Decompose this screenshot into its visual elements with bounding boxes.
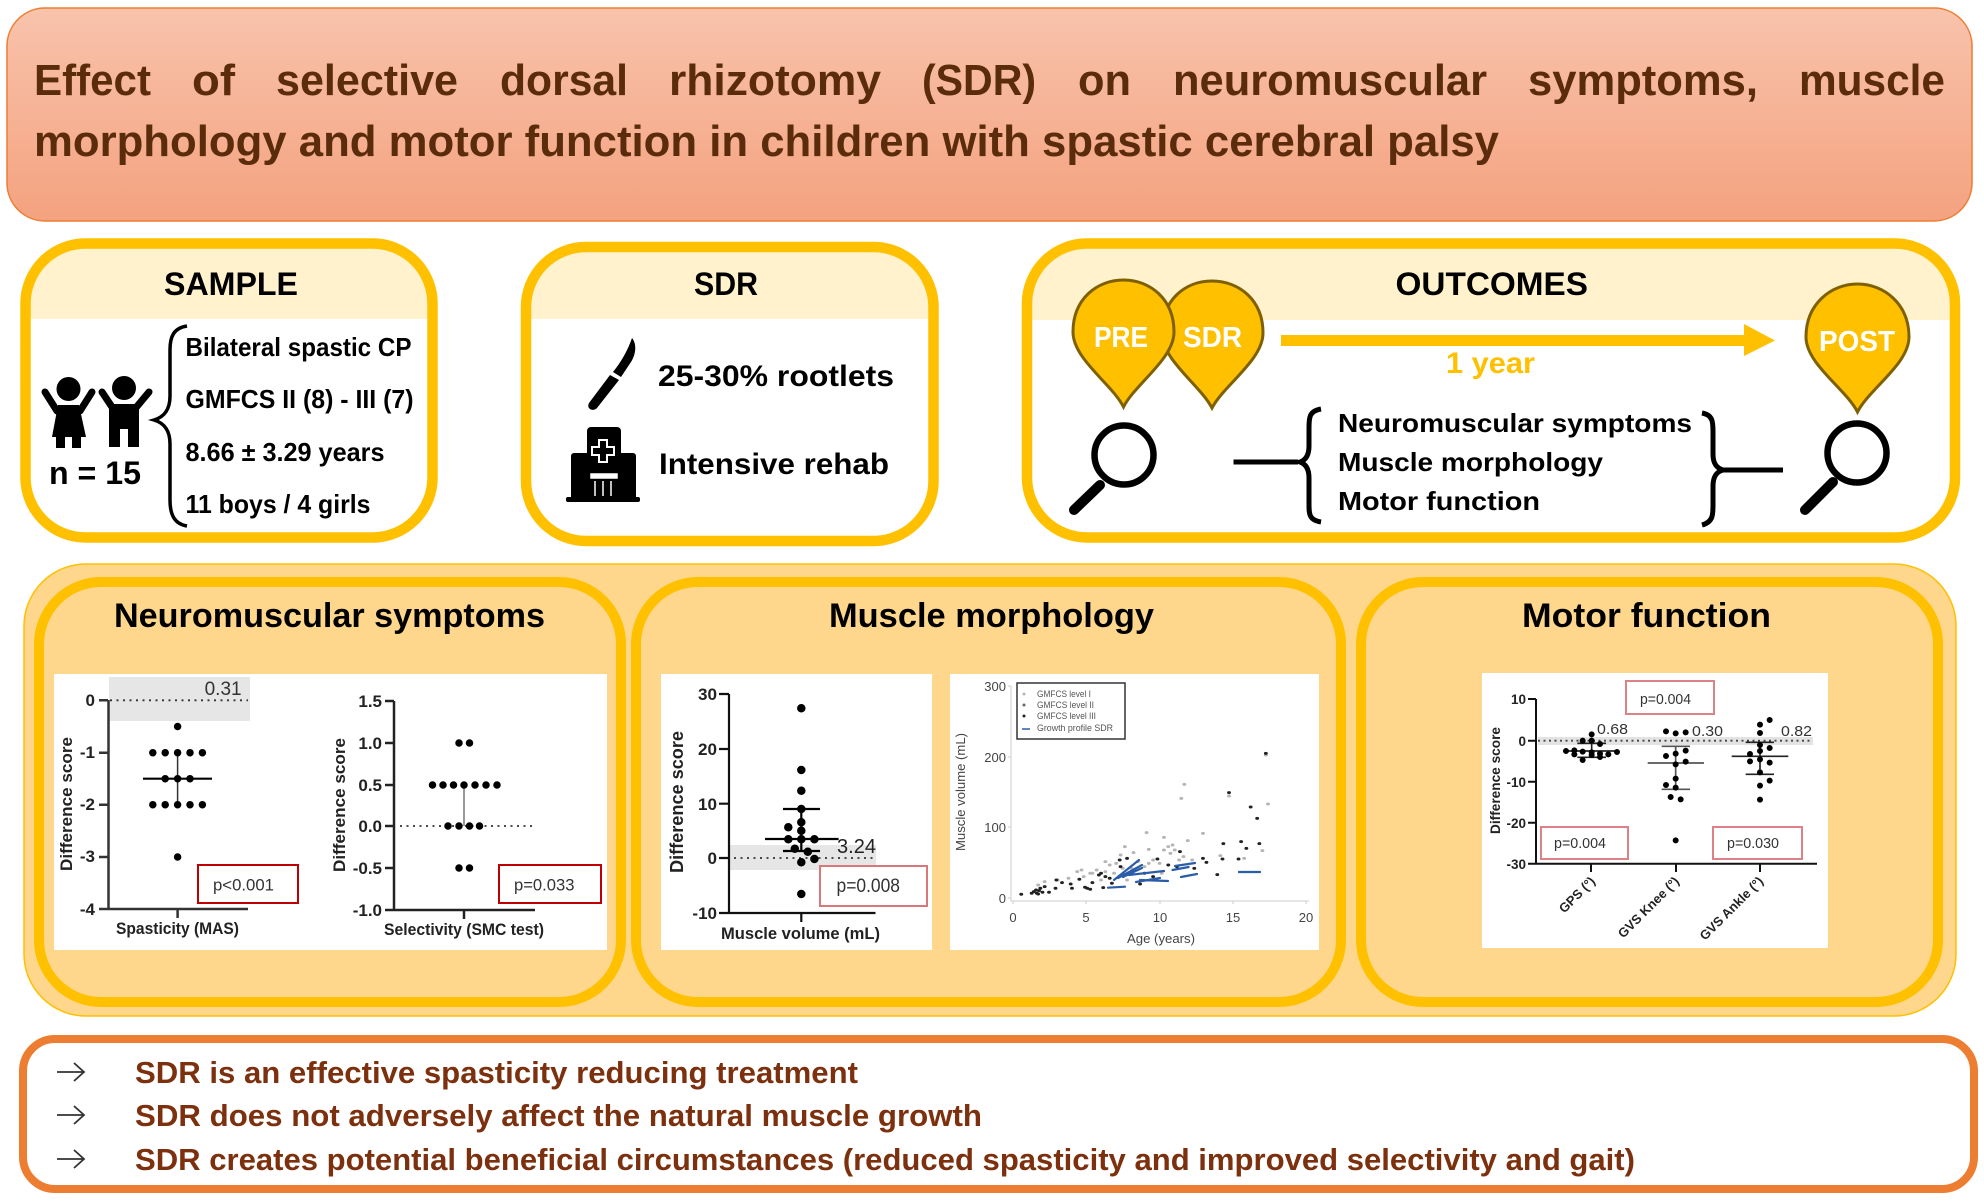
panel: muscle morphology — [636, 582, 1341, 1002]
chart: spasticity: -1 — [80, 743, 95, 762]
chart: selectivity: 1.5 — [358, 692, 382, 711]
chart: selectivity: 0.5 — [358, 776, 382, 795]
arrow: 1 year timeline — [1281, 324, 1775, 356]
chart: gait scores: p=0.004 — [1640, 692, 1691, 708]
chart: gait scores — [1482, 673, 1828, 948]
chart: gait scores: -10 — [1506, 775, 1526, 790]
panel: SDR — [526, 247, 934, 541]
chart: muscle volume difference: -10 — [692, 904, 717, 923]
title text: (SDR) — [922, 56, 1036, 105]
chart: muscle volume difference — [661, 674, 932, 950]
chart: growth scatter: 100 — [984, 820, 1006, 835]
pin: SDR — [1162, 281, 1263, 408]
chart: gait scores: 0.68 — [1597, 721, 1628, 738]
panel: sample — [26, 244, 432, 538]
chart: spasticity: Spasticity (MAS) — [116, 919, 239, 938]
chart: growth scatter: 10 — [1153, 910, 1167, 925]
chart: selectivity: Difference score — [330, 738, 349, 872]
chart: selectivity: 0.0 — [358, 817, 382, 836]
panel: motor function — [1361, 582, 1938, 1002]
connector and right brace — [1702, 413, 1783, 525]
chart: muscle volume difference: Difference score — [667, 731, 687, 873]
label: 1 year: 1 year — [1446, 347, 1535, 380]
title text: symptoms, — [1528, 56, 1758, 105]
sample list — [186, 332, 414, 519]
chart: growth scatter: 0 — [999, 891, 1006, 906]
icon: hospital — [566, 427, 640, 502]
panel: outcomes — [1027, 244, 1955, 538]
outcome list — [1338, 408, 1692, 516]
conclusion text — [135, 1055, 1635, 1177]
pin: POST: POST — [1819, 326, 1895, 358]
chart: growth scatter: 5 — [1082, 910, 1090, 925]
chart: muscle volume difference: 3.24 — [837, 836, 876, 858]
chart: gait scores: 10 — [1511, 692, 1526, 707]
chart: selectivity — [330, 692, 601, 939]
chart: gait scores: 0 — [1518, 734, 1526, 749]
sample size: n = 15 — [49, 455, 141, 491]
chart: gait scores: Difference score — [1487, 727, 1503, 834]
heading: SDR: SDR — [694, 266, 758, 302]
chart: gait scores: 0.82 — [1781, 723, 1812, 740]
title text: muscle — [1799, 56, 1945, 105]
heading: muscle morphology: Muscle morphology — [829, 597, 1154, 635]
scatter legend: GMFCS level II — [1037, 700, 1094, 710]
outcome list: Neuromuscular symptoms — [1338, 408, 1692, 438]
chart: selectivity: -1.0 — [353, 901, 382, 920]
chart: growth scatter: 300 — [984, 679, 1006, 694]
scatter legend: GMFCS level I — [1037, 689, 1091, 699]
title text: selective — [276, 56, 458, 105]
chart: muscle volume difference: 30 — [698, 685, 717, 704]
icon: children — [45, 376, 149, 448]
title text — [34, 56, 1945, 166]
chart: muscle volume difference: 20 — [698, 740, 717, 759]
scatter legend: GMFCS level III — [1037, 711, 1096, 721]
chart: gait scores: GVS Ankle (°) — [1697, 874, 1766, 943]
sample list: GMFCS II (8) - III (7) — [186, 384, 414, 414]
conclusion text: SDR does not adversely affect the natural muscle growth — [135, 1098, 982, 1133]
title text: dorsal — [500, 56, 628, 105]
chart: spasticity — [57, 677, 298, 938]
pin: PRE: PRE — [1094, 322, 1148, 354]
arrows — [57, 1063, 84, 1168]
chart: spasticity: 0 — [86, 691, 95, 710]
heading: outcomes: OUTCOMES — [1396, 266, 1588, 302]
connector and left brace — [1234, 409, 1321, 522]
heading: motor function: Motor function — [1522, 597, 1771, 635]
chart panel background — [54, 674, 607, 950]
title text: neuromuscular — [1173, 56, 1487, 105]
brace — [154, 326, 187, 526]
chart: spasticity: 0.31 — [205, 679, 242, 700]
sample list: Bilateral spastic CP — [186, 332, 412, 362]
pin: POST — [1806, 284, 1909, 412]
outcome list: Muscle morphology — [1338, 447, 1604, 477]
scatter legend: Growth profile SDR — [1037, 723, 1113, 733]
icon: magnifier pre — [1074, 426, 1154, 510]
chart: gait scores: GVS Knee (°) — [1615, 874, 1682, 941]
chart: growth scatter — [950, 674, 1319, 950]
chart: muscle volume difference: p=0.008 — [836, 876, 900, 897]
heading: sample: SAMPLE — [164, 266, 298, 302]
chart: gait scores: p=0.030 — [1727, 836, 1779, 852]
chart: selectivity: Selectivity (SMC test) — [384, 920, 544, 939]
title text: of — [192, 56, 235, 105]
pin: PRE — [1073, 280, 1174, 407]
chart: gait scores: -30 — [1506, 857, 1526, 872]
chart: growth scatter: 20 — [1299, 910, 1313, 925]
scatter legend — [1017, 683, 1125, 739]
sample list: 11 boys / 4 girls — [186, 489, 370, 519]
chart: spasticity: -3 — [80, 847, 95, 866]
chart: gait scores: -20 — [1506, 816, 1526, 831]
icon: scalpel — [588, 338, 635, 410]
outcome list: Motor function — [1338, 486, 1540, 516]
chart: growth scatter: Age (years) — [1127, 931, 1195, 946]
title text: rhizotomy — [669, 56, 882, 105]
title text: Effect — [34, 56, 151, 105]
chart: gait scores: 0.30 — [1692, 723, 1723, 740]
panel: conclusions — [23, 1039, 1974, 1189]
sample list: 8.66 ± 3.29 years — [186, 437, 384, 467]
chart: selectivity: p=0.033 — [514, 876, 574, 894]
conclusion text: SDR creates potential beneficial circumstances (reduced spasticity and improved selectivity and gait) — [135, 1142, 1635, 1177]
chart: growth scatter: Muscle volume (mL) — [953, 733, 968, 851]
title text: on — [1078, 56, 1131, 105]
chart: spasticity: p<0.001 — [213, 876, 274, 894]
chart: growth scatter: 0 — [1009, 910, 1017, 925]
panel: neuromuscular symptoms — [39, 582, 621, 1002]
title banner — [7, 8, 1972, 221]
chart: muscle volume difference: 0 — [708, 849, 717, 868]
conclusion text: SDR is an effective spasticity reducing treatment — [135, 1055, 858, 1090]
chart: growth scatter: 15 — [1226, 910, 1240, 925]
chart: spasticity: -2 — [80, 795, 95, 814]
chart: spasticity: Difference score — [57, 737, 76, 871]
chart: muscle volume difference: 10 — [698, 795, 717, 814]
title text: morphology and motor function in children with spastic cerebral palsy — [34, 117, 1500, 166]
panel: results background — [24, 564, 1956, 1016]
icon: magnifier post — [1805, 424, 1886, 510]
heading: neuromuscular symptoms: Neuromuscular symptoms — [114, 597, 545, 635]
chart: gait scores: p=0.004 — [1554, 836, 1606, 852]
pin: SDR: SDR — [1183, 322, 1242, 354]
chart: growth scatter: 200 — [984, 750, 1006, 765]
chart: muscle volume difference: Muscle volume (mL) — [721, 924, 880, 943]
chart: selectivity: 1.0 — [358, 734, 382, 753]
text: rootlets: 25-30% rootlets — [658, 360, 894, 393]
p value boxes — [1541, 681, 1802, 859]
text: intensive rehab: Intensive rehab — [659, 448, 889, 481]
chart: gait scores: GPS (°) — [1556, 874, 1598, 916]
chart: spasticity: -4 — [80, 900, 96, 919]
chart: selectivity: -0.5 — [353, 859, 382, 878]
